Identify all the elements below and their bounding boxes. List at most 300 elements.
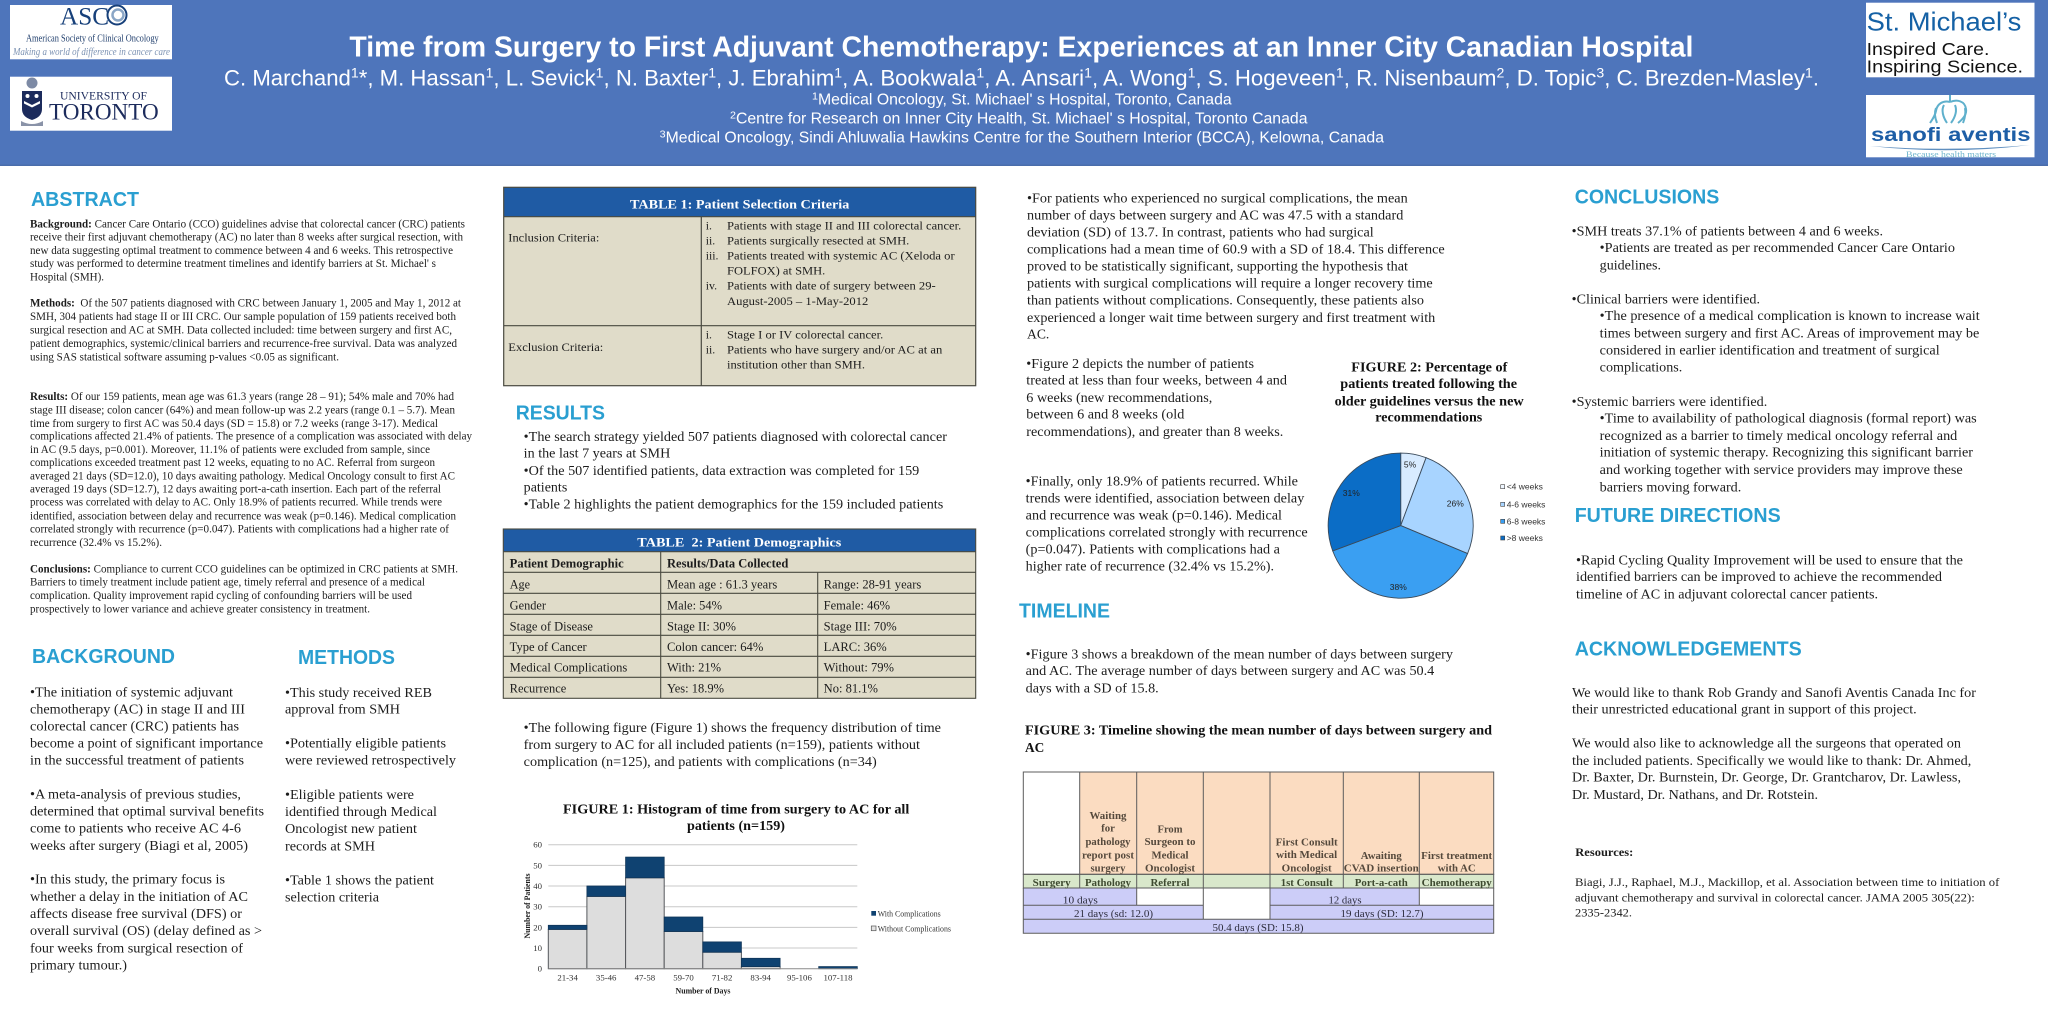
logo: ASCO: ASC	[60, 3, 109, 30]
background bullets: become a point of significant importance	[30, 736, 263, 751]
authors: 2	[1497, 64, 1505, 80]
authors: 1	[976, 64, 985, 80]
timeline step headings: Surgeon to	[1144, 836, 1196, 848]
conclusions bullets: •Patients are treated as per recommended Cancer Care Ontario	[1600, 240, 1955, 255]
title: Time from Surgery to First Adjuvant Chemotherapy: Experiences at an Inner City Canadian Hospital	[349, 32, 1693, 64]
timeline stage labels: Pathology	[1085, 877, 1132, 889]
surgical complications text: AC.	[1027, 327, 1049, 342]
heading: future directions: FUTURE DIRECTIONS	[1575, 504, 1781, 527]
figure 2 description text: treated at less than four weeks, between 4 and	[1026, 373, 1287, 388]
surgical complications text: than patients without complications. Consequently, these patients also	[1027, 293, 1424, 308]
y axis title: Number of Patients	[522, 873, 532, 938]
table 2 rows: Without: 79%	[824, 661, 894, 675]
figure 1 title	[563, 802, 909, 834]
panel: future directions	[1575, 504, 1963, 601]
background bullets: four weeks from surgical resection of	[30, 940, 243, 955]
figure 2: pie chart	[1328, 360, 1545, 598]
figure 2 title: older guidelines versus the new	[1335, 394, 1525, 409]
surgical complications text: •For patients who experienced no surgical complications, the mean	[1027, 191, 1408, 206]
figure 1 intro text	[524, 720, 941, 770]
logo: ASCO: American Society of Clinical Oncology	[26, 34, 159, 45]
surgical complications text: deviation (SD) of 13.7. In contrast, patients who had surgical	[1027, 225, 1374, 241]
figure 1 title: patients (n=159)	[687, 819, 785, 834]
heading: conclusions: CONCLUSIONS	[1575, 185, 1719, 208]
figure 1 title: FIGURE 1: Histogram of time from surgery to AC for all	[563, 802, 909, 817]
recurrence text: higher rate of recurrence (32.4% vs 15.2%).	[1026, 558, 1274, 574]
pie legend	[1501, 482, 1545, 543]
table 2 rows: Stage II: 30%	[667, 619, 736, 633]
timeline stage labels: Port-a-cath	[1355, 877, 1408, 889]
conclusions bullets: •The presence of a medical complication is known to increase wait	[1600, 308, 1980, 323]
timeline description: days with a SD of 15.8.	[1026, 680, 1159, 695]
background bullets: weeks after surgery (Biagi et al, 2005)	[30, 838, 248, 854]
x axis labels	[557, 973, 853, 983]
results bullets: •Table 2 highlights the patient demographics for the 159 included patients	[524, 496, 943, 511]
x axis labels: 35-46	[596, 973, 617, 983]
x axis title: Number of Days	[676, 985, 731, 995]
logo: sanofi aventis: Because health matters	[1906, 149, 1997, 159]
timeline step headings: Awaiting	[1361, 850, 1402, 862]
figure 1 intro text: complication (n=125), and patients with complications (n=34)	[524, 754, 877, 770]
background bullets: chemotherapy (AC) in stage II and III	[30, 701, 245, 717]
abstract results text: process was correlated with delay to AC. Only 18.9% of patients recurred. While trends were	[30, 496, 442, 509]
panel: background	[30, 645, 264, 973]
x axis labels: 59-70	[673, 973, 694, 983]
conclusions bullets: •SMH treats 37.1% of patients between 4 and 6 weeks.	[1572, 223, 1883, 238]
logo: St. Michael's	[1866, 3, 2034, 77]
table 2 rows: Medical Complications	[510, 661, 628, 675]
authors: C. Marchand	[224, 65, 350, 90]
conclusions bullets: •Systemic barriers were identified.	[1572, 394, 1767, 409]
inclusion criteria row: FOLFOX) at SMH.	[727, 263, 825, 277]
authors: 1	[1805, 64, 1813, 80]
authors: 1	[1188, 64, 1196, 80]
figure 3 title	[1025, 724, 1492, 756]
future directions text	[1576, 552, 1963, 601]
inclusion criteria row: Patients with date of surgery between 29-	[727, 278, 936, 292]
timeline stage labels: 1st Consult	[1281, 877, 1333, 889]
abstract results text: in AC (9.5 days, p=0.001). Moreover, 11.1% of patients were excluded from sample, since	[30, 443, 430, 456]
methods bullets: selection criteria	[285, 890, 379, 905]
panel: methods	[285, 646, 456, 905]
background bullets: •In this study, the primary focus is	[30, 872, 225, 887]
methods bullets: approval from SMH	[285, 702, 400, 717]
abstract conclusions text: Conclusions: Compliance to current CCO guidelines can be optimized in CRC patients at SMH.	[30, 562, 458, 575]
abstract results text: recurrence (32.4% vs 15.2%).	[30, 536, 162, 549]
abstract results text: stage III disease; colon cancer (64%) and mean follow-up was 2.2 years (range 0.1 – 5.7). Mean	[30, 404, 455, 417]
logo: University of Toronto: TORONTO	[49, 99, 159, 124]
icon: crest	[21, 78, 43, 126]
pie legend: 4-6 weeks	[1507, 499, 1545, 509]
timeline step headings: with AC	[1438, 862, 1476, 874]
abstract conclusions text: prospectively to lower variance and achieve greater consistency in treatment.	[30, 603, 370, 616]
pie slices	[1328, 453, 1473, 598]
table 2 rows: Recurrence	[510, 682, 566, 696]
table 2 column headings	[510, 557, 789, 571]
abstract conclusions text: Barriers to timely treatment include patient age, timely referral and presence of a medical	[30, 576, 425, 589]
table 2 rows: Mean age : 61.3 years	[667, 577, 778, 591]
background bullets: come to patients who receive AC 4-6	[30, 821, 241, 836]
background bullets: affects disease free survival (DFS) or	[30, 906, 242, 922]
abstract results text: complications exceeded treatment past 12 weeks, equating to no AC. Referral from surgeon	[30, 456, 435, 469]
heading: background: BACKGROUND	[32, 645, 175, 668]
methods bullets: identified through Medical	[285, 804, 437, 819]
figure 1: histogram	[522, 802, 952, 995]
timeline durations: 19 days (SD: 12.7)	[1340, 908, 1424, 920]
affiliations: 3	[660, 129, 666, 141]
timeline step headings: with Medical	[1276, 849, 1337, 861]
logo: St. Michael's: St. Michael’s	[1867, 7, 2021, 37]
surgical complications text: experienced a longer wait time between surgery and first treatment with	[1027, 310, 1435, 325]
timeline description: and AC. The average number of days between surgery and AC was 50.4	[1026, 663, 1435, 678]
abstract results text: Results: Of our 159 patients, mean age was 61.3 years (range 28 – 91); 54% male and 70% had	[30, 390, 454, 403]
authors: *, M. Hassan	[359, 65, 486, 90]
methods bullets: •Potentially eligible patients	[285, 736, 446, 751]
logo: sanofi aventis: sanofi aventis	[1871, 125, 2030, 146]
citation	[1575, 875, 1999, 920]
conclusions bullets: •Time to availability of pathological diagnosis (formal report) was	[1600, 411, 1977, 427]
y axis labels: 0	[538, 964, 543, 974]
figure 2 title	[1335, 360, 1525, 426]
table 2 rows: Gender	[510, 598, 546, 612]
pie legend: >8 weeks	[1507, 533, 1543, 543]
table 2 rows: Age	[510, 577, 530, 591]
abstract conclusions text	[30, 562, 458, 616]
methods bullets: •Table 1 shows the patient	[285, 872, 434, 887]
methods bullets	[285, 685, 456, 905]
exclusion criteria row: institution other than SMH.	[727, 358, 865, 372]
table 2 rows: Colon cancer: 64%	[667, 640, 763, 654]
timeline step headings: report post	[1082, 849, 1134, 861]
table 2 header	[503, 529, 976, 552]
authors: 1	[1084, 64, 1092, 80]
panel: results intro	[516, 401, 947, 511]
abstract background text: Hospital (SMH).	[30, 271, 104, 284]
table 2 rows: Range: 28-91 years	[824, 577, 922, 591]
abstract results text	[30, 390, 472, 549]
surgical complications text	[1027, 191, 1445, 342]
recurrence text: (p=0.047). Patients with complications had a	[1026, 541, 1280, 557]
table 1: patient selection criteria	[504, 187, 976, 386]
abstract results text: identified, association between delay and recurrence was weak (p=0.146). Medical complication	[30, 509, 456, 522]
figure 2 description text: •Figure 2 depicts the number of patients	[1026, 356, 1254, 371]
inclusion criteria row: Patients with stage II and III colorectal cancer.	[727, 218, 961, 232]
conclusions bullets: recognized as a barrier to timely medical oncology referral and	[1600, 428, 1958, 443]
x axis labels: 107-118	[824, 973, 853, 983]
y axis labels: 40	[533, 881, 543, 891]
authors: 1	[1336, 64, 1344, 80]
authors: 1	[834, 64, 842, 80]
inclusion criteria row: i.	[706, 218, 712, 232]
timeline step headings: Medical	[1152, 849, 1188, 861]
inclusion criteria row: iv.	[706, 278, 717, 292]
recurrence text: •Finally, only 18.9% of patients recurred. While	[1026, 473, 1298, 488]
figure 2 title: patients treated following the	[1340, 377, 1517, 392]
timeline stage labels	[1033, 877, 1492, 889]
legend	[871, 908, 952, 933]
timeline durations: 10 days	[1063, 894, 1098, 906]
abstract methods text: Methods: Of the 507 patients diagnosed with CRC between January 1, 2005 and May 1, 2012 at	[30, 297, 462, 310]
y axis labels: 50	[533, 860, 543, 870]
citation: Biagi, J.J., Raphael, M.J., Mackillop, et al. Association between time to initiation of	[1575, 875, 1999, 889]
recurrence text: trends were identified, association between delay	[1026, 490, 1305, 505]
recurrence text: complications correlated strongly with recurrence	[1026, 524, 1308, 539]
conclusions bullets: and working together with service providers may improve these	[1600, 462, 1963, 477]
inclusion criteria row: August-2005 – 1-May-2012	[727, 294, 868, 308]
inclusion criteria row	[508, 218, 961, 308]
surgical complications text: proved to be statistically significant, supporting the hypothesis that	[1027, 259, 1408, 274]
logo: St. Michael's: Inspiring Science.	[1867, 56, 2023, 76]
abstract methods text: SMH, 304 patients had stage II or III CRC. Our sample population of 159 patients received both	[30, 310, 456, 323]
abstract results text: averaged 21 days (SD=12.0), 10 days awaiting pathology. Medical Oncology consult to first AC	[30, 470, 455, 483]
table 2 rows: Yes: 18.9%	[667, 682, 724, 696]
conclusions bullets: •Clinical barriers were identified.	[1572, 291, 1760, 306]
icon: figures	[1930, 95, 1966, 123]
timeline description: •Figure 3 shows a breakdown of the mean number of days between surgery	[1026, 646, 1453, 661]
y axis labels: 10	[533, 943, 543, 953]
acknowledgements text: the included patients. Specifically we would like to thank: Dr. Ahmed,	[1572, 753, 1971, 768]
authors: 1	[486, 64, 494, 80]
logo: sanofi aventis	[1866, 95, 2034, 159]
timeline step headings: for	[1101, 823, 1115, 835]
methods bullets: •Eligible patients were	[285, 787, 414, 802]
methods bullets: records at SMH	[285, 838, 375, 853]
authors: , C. Brezden-Masley	[1604, 65, 1805, 90]
timeline durations: 50.4 days (SD: 15.8)	[1212, 922, 1304, 934]
heading: results: RESULTS	[516, 401, 605, 424]
logo: St. Michael's: Inspired Care.	[1867, 39, 1989, 59]
timeline stage labels: Chemotherapy	[1422, 877, 1492, 889]
panel: resources	[1575, 845, 1999, 920]
results bullets	[524, 429, 947, 511]
future directions text: identified barriers can be improved to achieve the recommended	[1576, 569, 1942, 584]
surgical complications text: patients with surgical complications will require a longer recovery time	[1027, 275, 1433, 290]
affiliations: Medical Oncology, St. Michael' s Hospital, Toronto, Canada	[818, 92, 1232, 109]
authors: , J. Ebrahim	[716, 65, 834, 90]
exclusion criteria row: Patients who have surgery and/or AC at an	[727, 343, 942, 357]
background bullets: •A meta-analysis of previous studies,	[30, 786, 241, 801]
bars: with complications	[548, 857, 857, 969]
affiliations: 1	[812, 91, 818, 103]
abstract results text: correlated strongly with recurrence (p=0.047). Patients with complications had a higher rate of	[30, 523, 449, 536]
acknowledgements text: Dr. Mustard, Dr. Nathans, and Dr. Rotstein.	[1572, 787, 1818, 802]
figure 2 title: FIGURE 2: Percentage of	[1351, 360, 1508, 375]
timeline durations	[1063, 894, 1424, 934]
y axis labels: 30	[533, 902, 543, 912]
conclusions bullets: barriers moving forward.	[1600, 479, 1741, 494]
table 2 rows: Female: 46%	[824, 598, 890, 612]
x axis labels: 21-34	[557, 973, 578, 983]
timeline step headings: Oncologist	[1145, 863, 1195, 875]
table 2 column headings: Patient Demographic	[510, 557, 624, 571]
x axis labels: 47-58	[635, 973, 656, 983]
timeline step headings: pathology	[1086, 836, 1131, 848]
recurrence text	[1026, 473, 1308, 574]
timeline stage labels: Surgery	[1033, 877, 1071, 889]
y axis labels	[533, 840, 543, 974]
table 1 header: TABLE 1: Patient Selection Criteria	[630, 197, 850, 211]
results bullets: patients	[524, 480, 567, 495]
figure 2 description text	[1026, 356, 1287, 440]
exclusion criteria row: i.	[706, 328, 712, 342]
table 2 rows: With: 21%	[667, 661, 721, 675]
authors: 3	[1596, 64, 1604, 80]
timeline step headings: Oncologist	[1282, 862, 1332, 874]
authors: 1	[351, 64, 359, 80]
exclusion criteria row	[508, 328, 942, 372]
abstract background text: receive their first adjuvant chemotherapy (AC) no later than 8 weeks after surgical resection, with	[30, 231, 463, 244]
pie legend: <4 weeks	[1507, 482, 1543, 492]
panel: conclusions	[1572, 185, 1980, 494]
conclusions bullets: considered in earlier identification and treatment of surgical	[1600, 343, 1940, 358]
x axis labels: 71-82	[712, 973, 732, 983]
timeline step headings: surgery	[1090, 863, 1126, 875]
timeline durations: 12 days	[1328, 894, 1362, 906]
authors: , S. Hogeveen	[1195, 65, 1336, 90]
header banner	[0, 0, 2048, 166]
timeline durations: 21 days (sd: 12.0)	[1074, 908, 1153, 920]
results bullets: •Of the 507 identified patients, data extraction was completed for 159	[524, 463, 919, 478]
y axis labels: 20	[533, 922, 543, 932]
abstract background text	[30, 218, 465, 284]
table 2 rows: No: 81.1%	[824, 682, 878, 696]
timeline step headings: Waiting	[1090, 810, 1127, 822]
conclusions bullets: initiation of systemic therapy. Recognizing this significant barrier	[1600, 445, 1973, 460]
abstract results text: time from surgery to first AC was 50.4 days (SD = 15.8) or 7.2 weeks (range 3-17). Medical	[30, 417, 438, 430]
table 2 column headings: Results/Data Collected	[667, 557, 789, 571]
timeline step headings: First Consult	[1276, 836, 1338, 848]
surgical complications text: complications had a mean time of 60.9 with a SD of 18.4. This difference	[1027, 241, 1445, 256]
exclusion criteria row: ii.	[706, 343, 715, 357]
timeline description	[1026, 646, 1453, 695]
methods bullets: Oncologist new patient	[285, 821, 417, 836]
panel: abstract	[30, 188, 472, 616]
table 2 rows: LARC: 36%	[824, 640, 887, 654]
panel: timeline	[1019, 599, 1492, 756]
inclusion criteria row: ii.	[706, 233, 715, 247]
table 1 header	[504, 187, 976, 217]
logo: ASCO: Making a world of difference in cancer care	[12, 47, 170, 58]
authors: , D. Topic	[1504, 65, 1596, 90]
pie labels: 38%	[1390, 582, 1407, 592]
abstract results text: complications affected 21.4% of patients. The presence of a complication was associated with delay	[30, 429, 472, 442]
abstract background text: study was performed to determine treatment timelines and identify barriers at St. Michael' s	[30, 257, 436, 270]
logo: ASCO	[10, 3, 172, 59]
results bullets: •The search strategy yielded 507 patients diagnosed with colorectal cancer	[524, 429, 947, 444]
table 2 rows: Male: 54%	[667, 598, 722, 612]
figure 3: timeline table	[1023, 772, 1494, 934]
background bullets: •The initiation of systemic adjuvant	[30, 685, 233, 700]
legend: Without Complications	[878, 923, 952, 933]
inclusion criteria row: iii.	[706, 248, 719, 262]
figure 1 intro text: from surgery to AC for all included patients (n=159), patients without	[524, 737, 920, 753]
methods bullets: •This study received REB	[285, 685, 432, 700]
abstract results text: averaged 19 days (SD=12.7), 12 days awaiting port-a-cath insertion. Each part of the referral	[30, 483, 441, 496]
abstract conclusions text: complication. Quality improvement rapid cycling of confounding barriers will be used	[30, 589, 412, 602]
authors: , R. Nisenbaum	[1344, 65, 1497, 90]
background bullets: overall survival (OS) (delay defined as >	[30, 923, 262, 939]
abstract background text: new data suggesting optimal treatment to commence between 4 and 6 weeks. This retrospective	[30, 244, 453, 257]
panel: acknowledgements	[1572, 637, 1976, 802]
inclusion criteria row: Patients treated with systemic AC (Xeloda or	[727, 248, 955, 262]
pie legend: 6-8 weeks	[1507, 516, 1545, 526]
table 2 rows: Stage III: 70%	[824, 619, 897, 633]
inclusion criteria row: Inclusion Criteria:	[508, 231, 599, 245]
abstract methods text: patient demographics, systemic/clinical barriers and recurrence-free survival. Data was analyzed	[30, 337, 457, 350]
conclusions bullets: times between surgery and first AC. Areas of improvement may be	[1600, 325, 1979, 340]
x axis labels: 95-106	[787, 973, 812, 983]
background bullets: primary tumour.)	[30, 957, 127, 973]
heading: timeline: TIMELINE	[1019, 599, 1110, 622]
pie labels: 26%	[1447, 499, 1464, 509]
conclusions bullets: guidelines.	[1600, 257, 1661, 272]
inclusion criteria row: Patients surgically resected at SMH.	[727, 233, 909, 247]
pie labels: 5%	[1404, 460, 1417, 470]
legend: With Complications	[878, 908, 941, 918]
bars: without complications	[548, 878, 780, 969]
table 2 rows: Stage of Disease	[510, 619, 593, 633]
authors: 1	[596, 64, 604, 80]
table 2 rows: Type of Cancer	[510, 640, 587, 654]
methods bullets: were reviewed retrospectively	[285, 753, 456, 768]
background bullets	[30, 685, 264, 973]
background bullets: in the successful treatment of patients	[30, 752, 244, 767]
abstract methods text: surgical resection and AC at SMH. Data collected included: time between surgery and first AC,	[30, 324, 452, 337]
results bullets: in the last 7 years at SMH	[524, 446, 670, 461]
heading: abstract: ABSTRACT	[31, 188, 139, 211]
abstract background text: Background: Cancer Care Ontario (CCO) guidelines advise that colorectal cancer (CRC) patients	[30, 218, 465, 231]
authors: , L. Sevick	[493, 65, 597, 90]
acknowledgements text: their unrestricted educational grant in support of this project.	[1572, 702, 1917, 717]
resources heading: Resources:	[1575, 845, 1633, 859]
figure 2 description text: 6 weeks (new recommendations,	[1026, 390, 1212, 406]
authors: .	[1813, 65, 1819, 90]
surgical complications text: number of days between surgery and AC was 47.5 with a standard	[1027, 207, 1404, 222]
timeline step headings	[1082, 810, 1493, 875]
affiliations: Centre for Research on Inner City Health, St. Michael' s Hospital, Toronto Canada	[736, 111, 1308, 128]
abstract methods text: using SAS statistical software assuming p-values <0.05 as significant.	[30, 351, 339, 364]
conclusions bullets: complications.	[1600, 359, 1682, 374]
figure 3 title: FIGURE 3: Timeline showing the mean number of days between surgery and	[1025, 724, 1492, 739]
conclusions bullets	[1572, 223, 1980, 494]
authors: , A. Ansari	[984, 65, 1084, 90]
authors: , A. Wong	[1092, 65, 1188, 90]
x axis labels: 83-94	[750, 973, 772, 983]
acknowledgements text	[1572, 685, 1976, 802]
acknowledgements text: We would also like to acknowledge all the surgeons that operated on	[1572, 736, 1961, 751]
figure 2 description text: between 6 and 8 weeks (old	[1026, 407, 1185, 423]
logo: University of Toronto	[10, 77, 172, 131]
exclusion criteria row: Stage I or IV colorectal cancer.	[727, 328, 883, 342]
future directions text: •Rapid Cycling Quality Improvement will be used to ensure that the	[1576, 552, 1963, 567]
abstract methods text	[30, 297, 462, 364]
figure 2 title: recommendations	[1375, 411, 1483, 426]
timeline step headings: CVAD insertion	[1344, 862, 1419, 874]
authors: 1	[708, 64, 716, 80]
background bullets: colorectal cancer (CRC) patients has	[30, 719, 239, 735]
citation: adjuvant chemotherapy and survival in colorectal cancer. JAMA 2005 305(22):	[1575, 891, 1975, 905]
acknowledgements text: We would like to thank Rob Grandy and Sanofi Aventis Canada Inc for	[1572, 685, 1976, 700]
affiliations: 2	[730, 110, 736, 122]
timeline stage labels: Referral	[1150, 877, 1190, 889]
y axis labels: 60	[533, 840, 543, 850]
logo: University of Toronto: UNIVERSITY OF	[60, 90, 147, 102]
heading: acknowledgements: ACKNOWLEDGEMENTS	[1575, 637, 1802, 660]
affiliations: Medical Oncology, Sindi Ahluwalia Hawkins Centre for the Southern Interior (BCCA), Kelowna, Canada	[666, 130, 1384, 147]
authors: , N. Baxter	[604, 65, 708, 90]
citation: 2335-2342.	[1575, 906, 1632, 920]
future directions text: timeline of AC in adjuvant colorectal cancer patients.	[1576, 586, 1878, 601]
